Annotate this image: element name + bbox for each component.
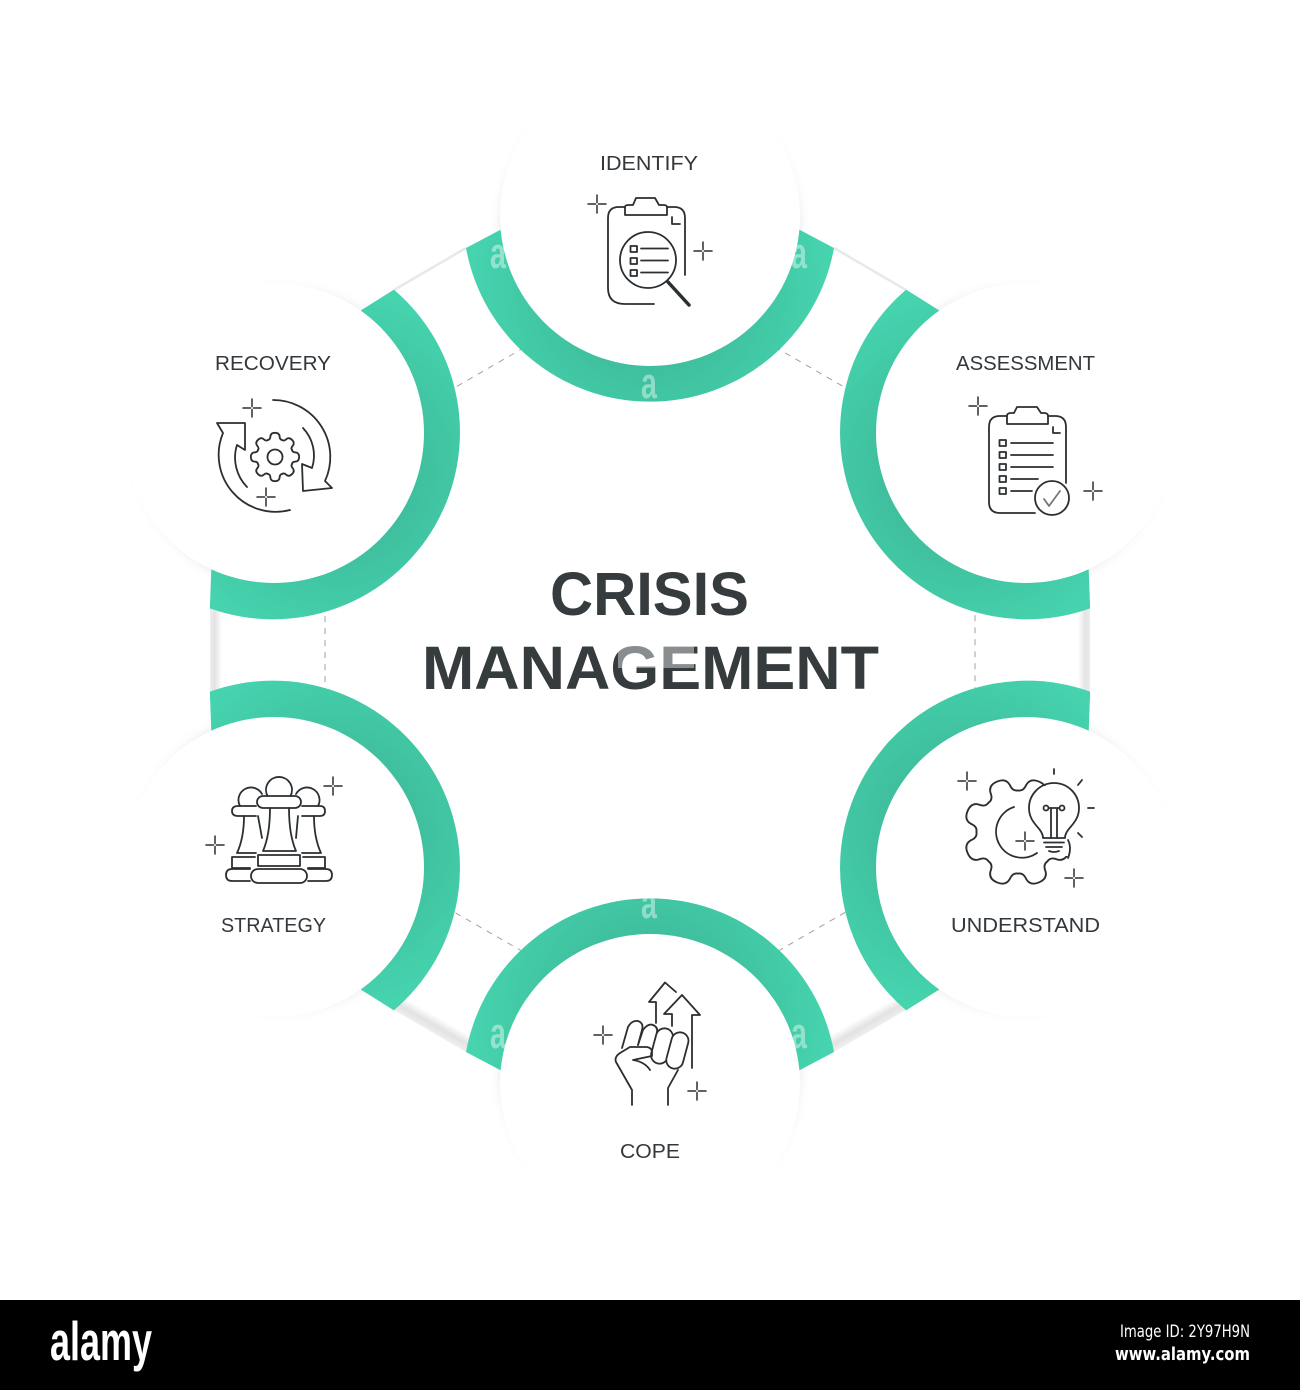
- label: strategy: STRATEGY: [221, 914, 326, 937]
- title: MANAGEMENT: [422, 634, 879, 702]
- step: assessment: [956, 352, 1102, 515]
- step: cope: [594, 982, 706, 1163]
- label: assessment: ASSESSMENT: [956, 352, 1095, 375]
- step: understand: [947, 761, 1100, 937]
- label: recovery: RECOVERY: [215, 352, 331, 375]
- teal arc: identify: [466, 230, 834, 402]
- step: recovery: [215, 352, 332, 512]
- icon: raised fist with arrows: [594, 982, 706, 1105]
- watermark marks on arcs: [490, 228, 807, 1057]
- icon: clipboard checklist: [969, 397, 1102, 515]
- teal arc: assessment: [773, 281, 1106, 685]
- footer url: www.alamy.com: [1115, 1344, 1250, 1365]
- footer bar: [0, 1300, 1300, 1390]
- footer logo: alamy: [50, 1310, 152, 1372]
- label: cope: COPE: [620, 1140, 680, 1163]
- teal arc: recovery: [194, 281, 527, 685]
- watermark marks on arcs: a: [641, 878, 657, 927]
- outer grey connectors: [210, 248, 1090, 1052]
- step: strategy: [206, 777, 342, 937]
- step: identify: [588, 152, 712, 305]
- watermark marks on arcs: a: [641, 358, 657, 407]
- watermark marks on arcs: a: [490, 1008, 506, 1057]
- title: [422, 560, 879, 702]
- watermark marks on arcs: a: [490, 228, 506, 277]
- icon: clipboard with magnifier: [588, 195, 712, 305]
- label: understand: UNDERSTAND: [951, 914, 1100, 937]
- watermark marks on arcs: a: [791, 1008, 807, 1057]
- circle shadows: [136, 80, 1164, 1220]
- teal arc: cope: [466, 898, 834, 1070]
- icon: gear with circular arrows: [217, 399, 332, 512]
- label: identify: IDENTIFY: [600, 152, 698, 175]
- watermark marks on arcs: a: [791, 228, 807, 277]
- icon: gear with light bulb: [947, 761, 1094, 903]
- title: CRISIS: [550, 560, 749, 628]
- white circles: [124, 66, 1176, 1234]
- dashed inner hexagon: [325, 275, 975, 1025]
- icon: chess pawns: [206, 777, 342, 883]
- footer image id: Image ID: 2Y97H9N: [1120, 1322, 1250, 1342]
- teal arc: understand: [773, 615, 1106, 1019]
- teal arc: strategy: [194, 615, 527, 1019]
